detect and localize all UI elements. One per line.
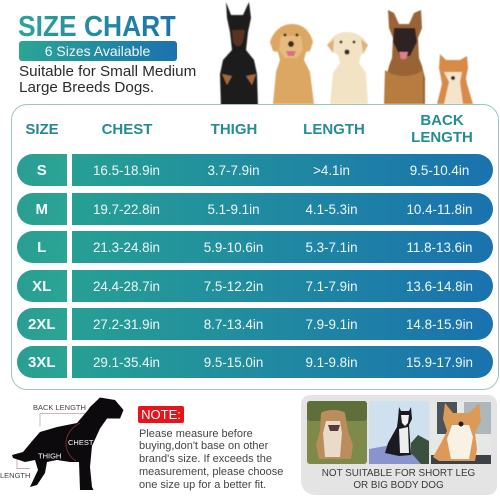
row: M — [72, 192, 492, 224]
row: S: 3.7-7.9in — [207, 163, 260, 178]
photo: corgi — [431, 402, 491, 464]
size labels column — [17, 154, 67, 378]
row: M: 10.4-11.8in — [406, 202, 472, 216]
length label: LENGTH — [0, 471, 30, 480]
note badge: NOTE: — [141, 407, 181, 422]
length marker — [17, 456, 33, 468]
back length label: BACK LENGTH — [33, 403, 86, 412]
row: M: 19.7-22.8in — [93, 202, 160, 216]
chest label: CHEST — [68, 438, 94, 447]
thigh label: THIGH — [38, 452, 61, 460]
not suitable caption: OR BIG BODY DOG — [353, 480, 444, 490]
icon: labrador — [327, 32, 368, 104]
icon: shiba inu — [437, 54, 473, 104]
row: S: >4.1in — [313, 163, 350, 178]
size labels column: 2XL — [28, 316, 56, 333]
row: XL: 7.5-12.2in — [204, 278, 263, 294]
row: L: 5.3-7.1in — [305, 240, 358, 255]
row: XL — [72, 270, 492, 302]
row: M: 5.1-9.1in — [207, 202, 260, 216]
table header: CHEST — [102, 121, 152, 138]
row: XL: 7.1-7.9in — [305, 278, 358, 294]
note text: Please measure before — [139, 428, 253, 440]
row: L: 21.3-24.8in — [93, 240, 160, 255]
table header: LENGTH — [303, 121, 365, 138]
row: 3XL: 9.5-15.0in — [204, 355, 263, 370]
row: 3XL: 15.9-17.9in — [406, 355, 473, 370]
dogs group photo — [219, 2, 474, 104]
panel: not suitable dogs — [300, 395, 497, 495]
badge: 6 sizes available: 6 Sizes Available — [45, 42, 150, 58]
back length marker — [40, 414, 85, 426]
row: XL: 24.4-28.7in — [93, 278, 160, 294]
icon: german shepherd — [384, 10, 425, 104]
table header: THIGH — [211, 121, 257, 138]
row: L: 5.9-10.6in — [204, 240, 263, 255]
size labels column: M — [36, 200, 48, 218]
table header: BACK — [420, 112, 464, 129]
row: XL: 13.6-14.8in — [406, 278, 473, 294]
note text — [139, 428, 283, 491]
note text: measurement, please choose — [139, 466, 283, 478]
row: 3XL: 29.1-35.4in — [93, 355, 160, 370]
row: L — [72, 231, 492, 263]
photo: bulldog — [307, 401, 367, 464]
chest marker — [66, 423, 80, 461]
icon: doberman — [220, 2, 258, 108]
note text: brand's size. If exceeds the — [139, 453, 272, 465]
size labels column: S — [37, 162, 47, 179]
badge: 6 sizes available — [18, 40, 176, 60]
row: 2XL: 7.9-9.1in — [305, 317, 358, 332]
row: 2XL: 14.8-15.9in — [406, 317, 473, 332]
dog measurement diagram — [0, 398, 124, 490]
title: SIZE CHART — [18, 11, 176, 43]
subtitle text: Suitable for Small Medium — [19, 63, 196, 80]
panel: size table — [10, 104, 498, 390]
row: 2XL — [72, 308, 492, 340]
row: 2XL: 27.2-31.9in — [93, 317, 160, 332]
table header: SIZE — [25, 121, 59, 138]
row: 3XL — [72, 346, 492, 378]
row: S — [72, 154, 492, 186]
not suitable caption: NOT SUITABLE FOR SHORT LEG — [322, 468, 475, 479]
size labels column: 3XL — [28, 354, 56, 371]
size labels column: L — [37, 239, 46, 256]
photo: husky — [369, 401, 429, 464]
subtitle text — [19, 63, 196, 96]
size labels column: XL — [32, 278, 51, 294]
icon: golden retriever — [270, 24, 314, 104]
row: L: 11.8-13.6in — [406, 240, 472, 255]
note text: one size up for a better fit. — [139, 479, 266, 491]
table header: LENGTH — [411, 128, 473, 146]
row: S: 16.5-18.9in — [93, 163, 160, 178]
table header — [25, 112, 473, 146]
icon: dog silhouette — [12, 398, 124, 490]
row: M: 4.1-5.3in — [305, 202, 358, 216]
subtitle text: Large Breeds Dogs. — [19, 78, 154, 96]
not suitable caption — [322, 468, 475, 490]
row: 3XL: 9.1-9.8in — [305, 355, 358, 370]
row: 2XL: 8.7-13.4in — [204, 317, 263, 332]
row: S: 9.5-10.4in — [410, 163, 469, 178]
note text: buying,don't base on other — [139, 440, 268, 452]
